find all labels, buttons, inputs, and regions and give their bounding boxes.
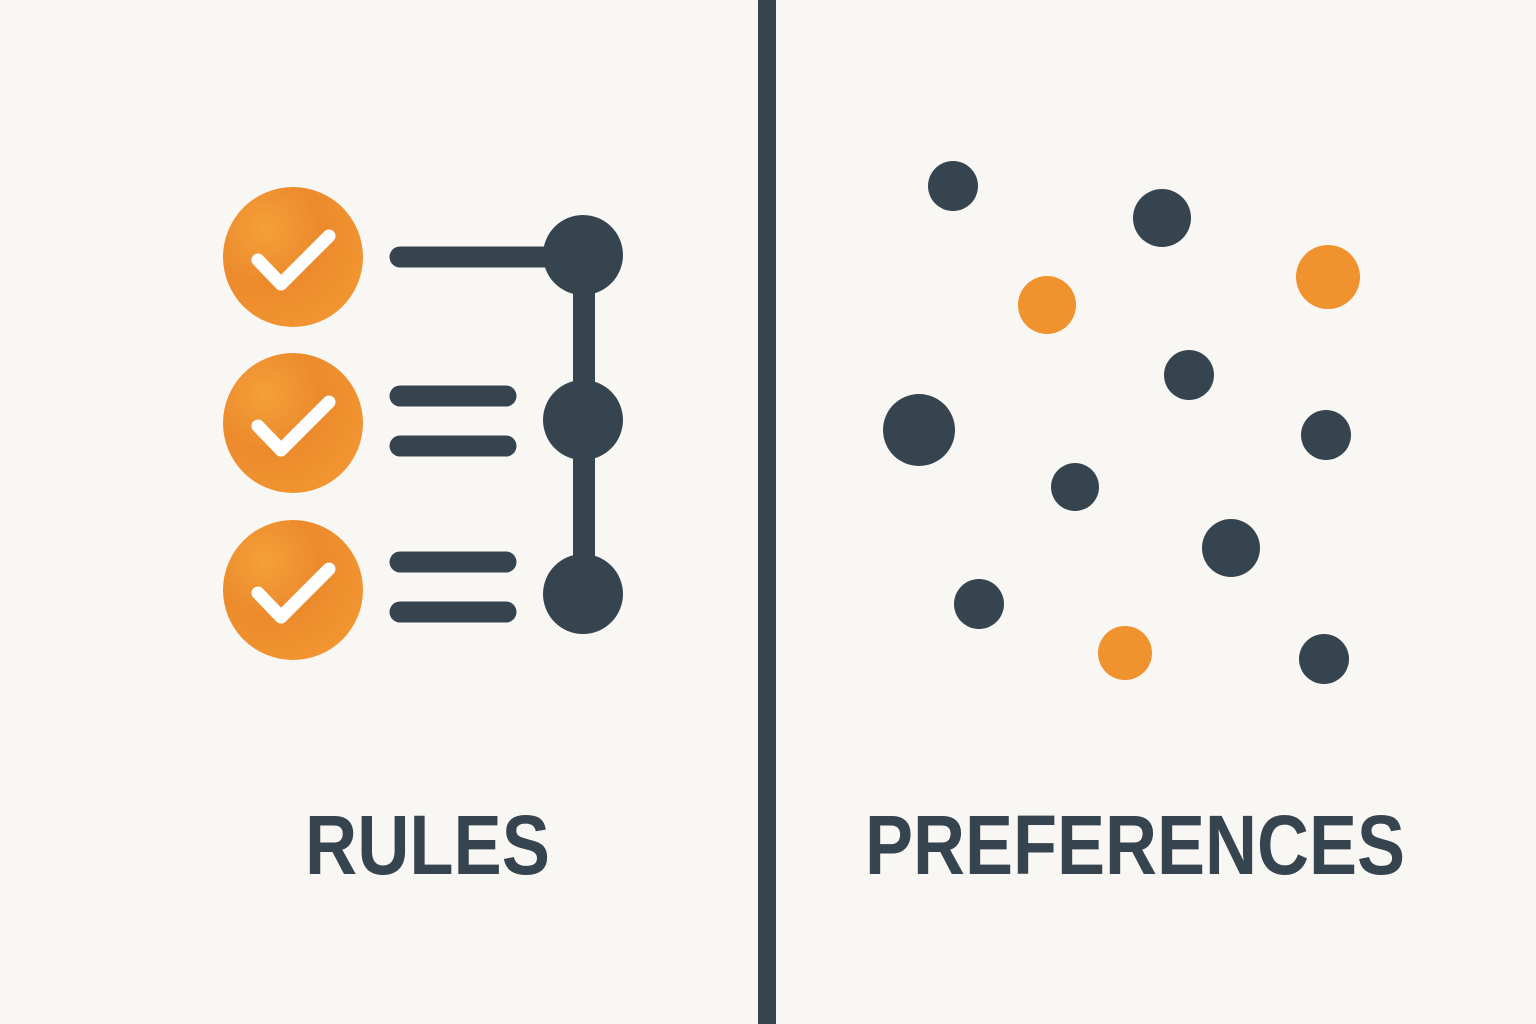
divider [758,0,776,1024]
label: preferences: PREFERENCES [865,798,1405,892]
icon: check circle 1 [223,187,363,327]
panel: rules [223,187,623,892]
connector tree [400,215,623,634]
panel: preferences [865,161,1405,892]
icon: check circle 3 [223,520,363,660]
icon: check circle 2 [223,353,363,493]
scattered dots [883,161,1360,684]
label: rules: RULES [305,798,550,892]
